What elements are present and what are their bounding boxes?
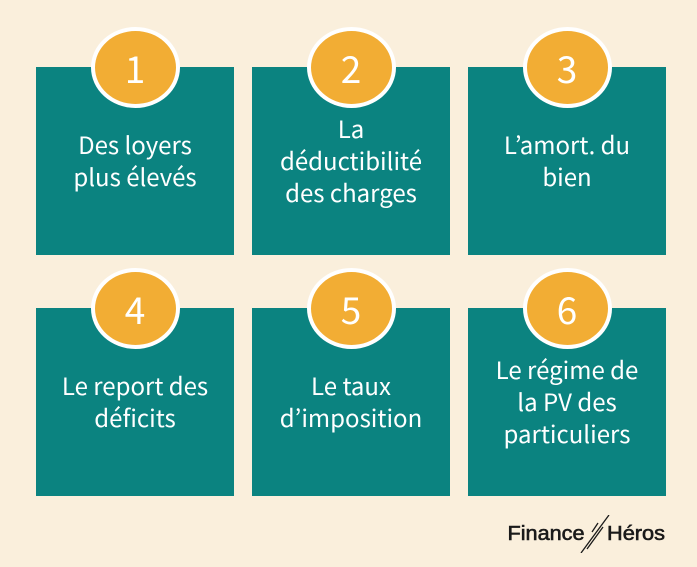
number badge 5: 5: [341, 281, 361, 335]
panel: card 4: [36, 308, 234, 496]
text: card 3: [504, 126, 630, 193]
text: card 5: d’imposition: [280, 399, 422, 434]
number badge 1: 1: [125, 40, 145, 94]
panel: card 6: [468, 308, 666, 496]
text: card 2: La: [338, 110, 364, 145]
text: card 6: la PV des: [517, 383, 617, 418]
text: card 1: Des loyers: [78, 126, 192, 161]
panel: card 2: [252, 67, 450, 255]
logo: Finance Héros: Finance: [508, 523, 584, 545]
text: card 1: [73, 126, 197, 193]
number badge 3: 3: [557, 40, 577, 94]
text: card 4: [62, 367, 208, 434]
number badge 2: [307, 27, 396, 108]
number badge 1: [91, 27, 180, 108]
text: card 2: déductibilité: [280, 142, 422, 177]
number badge 4: 4: [125, 281, 145, 335]
text: card 3: L’amort. du: [504, 126, 630, 161]
panel: card 5: [252, 308, 450, 496]
text: card 6: particuliers: [504, 415, 630, 450]
text: card 5: Le taux: [311, 367, 391, 402]
number badge 5: [307, 268, 396, 349]
text: card 2: [280, 110, 422, 209]
panel: card 1: [36, 67, 234, 255]
text: card 6: [496, 351, 638, 450]
number badge 3: [523, 27, 612, 108]
text: card 2: des charges: [285, 174, 417, 209]
number badge 6: [523, 268, 612, 349]
number badge 2: 2: [341, 40, 361, 94]
number badge 4: [91, 268, 180, 349]
text: card 3: bien: [542, 158, 592, 193]
logo: Finance Héros: Héros: [607, 523, 665, 545]
text: card 1: plus élevés: [73, 158, 197, 193]
text: card 5: [280, 367, 422, 434]
text: card 4: Le report des: [62, 367, 208, 402]
number badge 6: 6: [557, 281, 577, 335]
logo: Finance Héros: [508, 515, 665, 553]
text: card 6: Le régime de: [496, 351, 638, 386]
text: card 4: déficits: [94, 399, 176, 434]
panel: card 3: [468, 67, 666, 255]
